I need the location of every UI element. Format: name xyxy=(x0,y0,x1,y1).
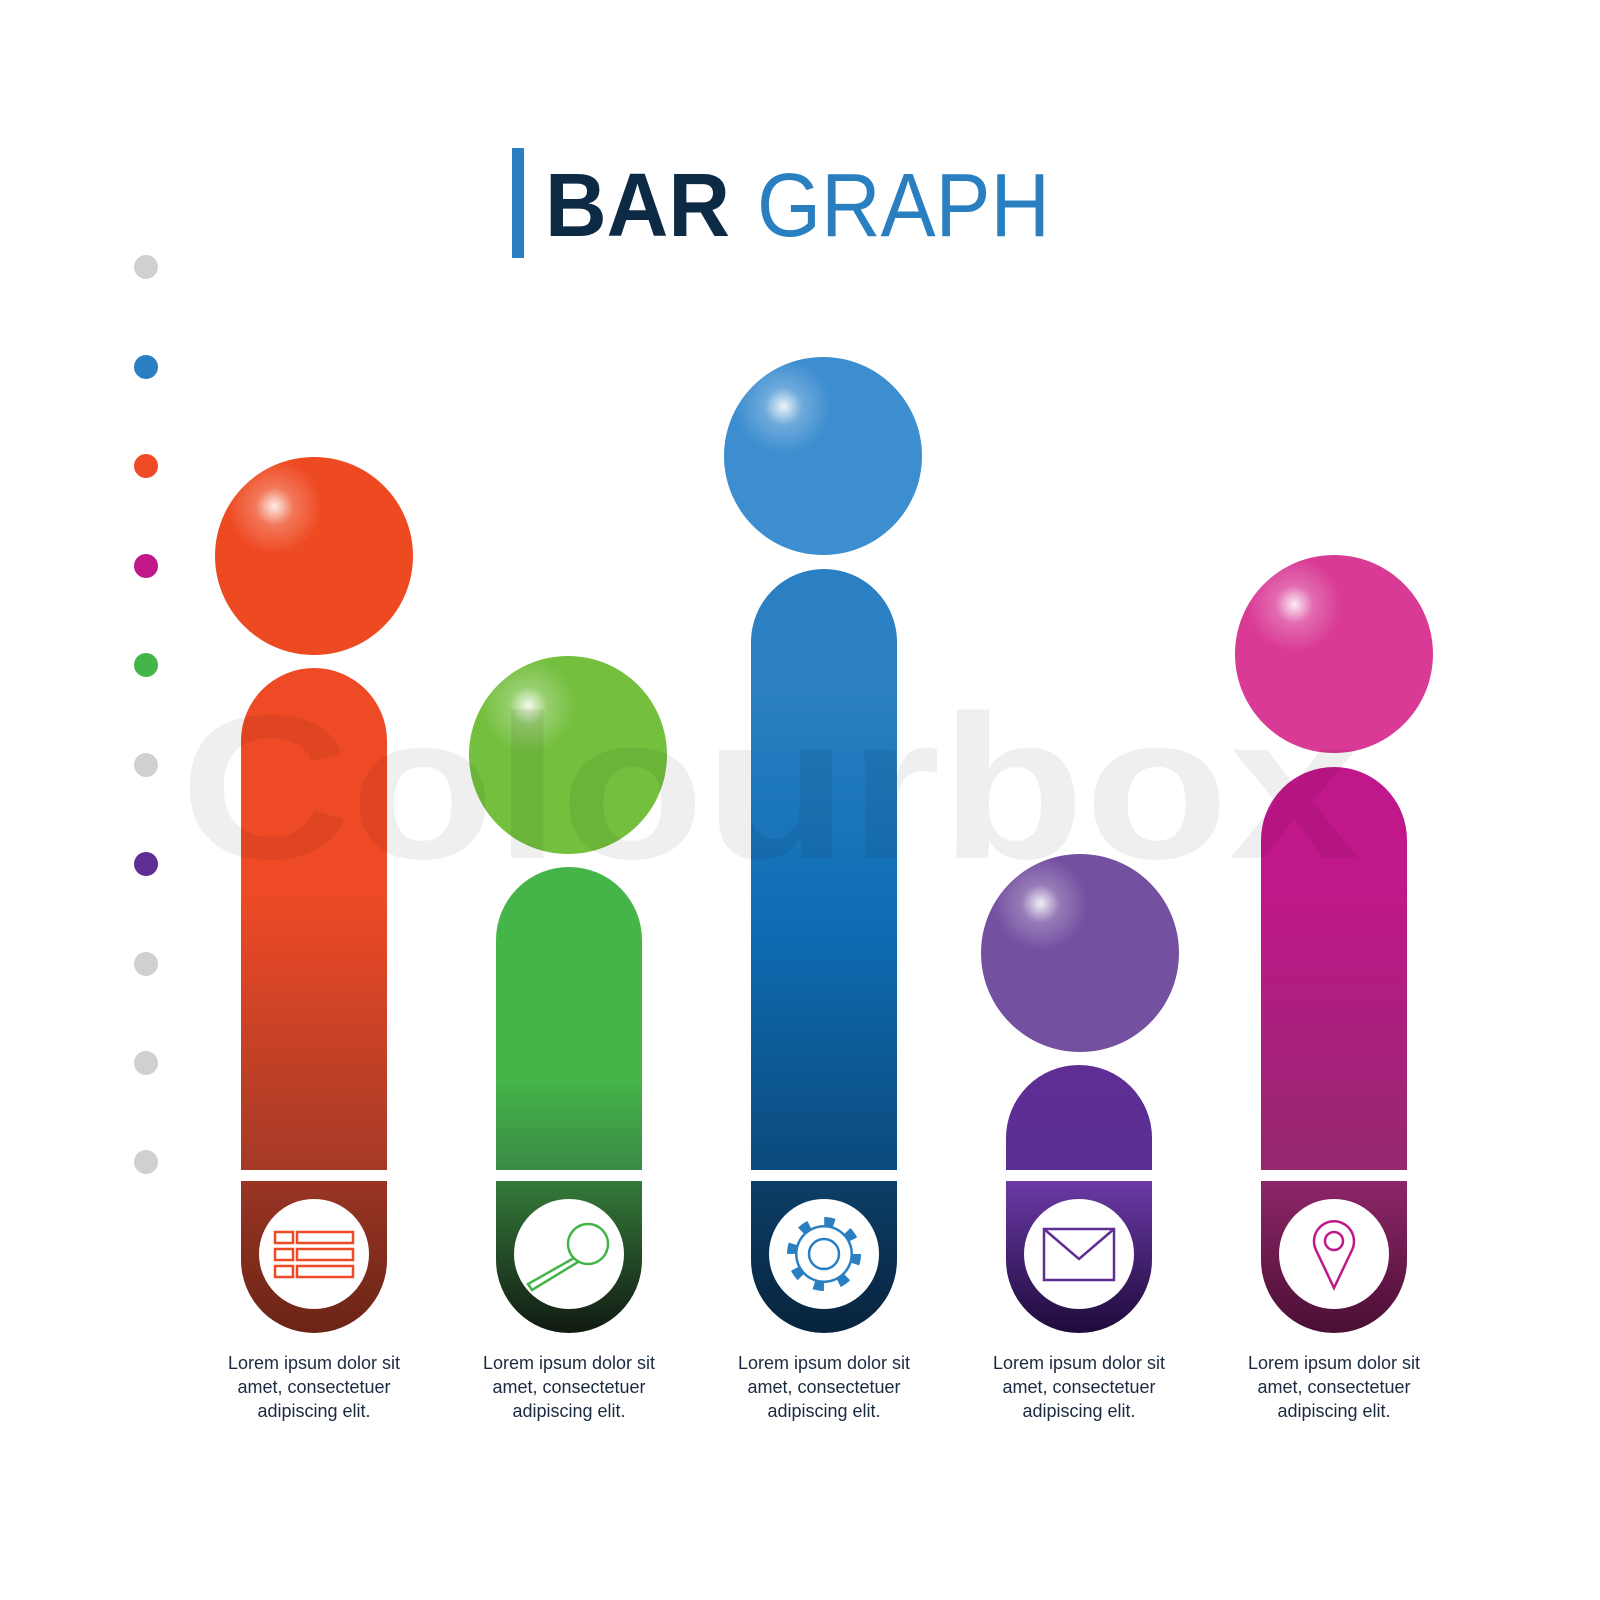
bar: green xyxy=(469,656,667,1333)
captions: adipiscing elit. xyxy=(257,1401,371,1421)
captions: Lorem ipsum dolor sit xyxy=(483,1353,655,1373)
icon: envelope xyxy=(1024,1199,1134,1309)
icon: list xyxy=(259,1199,369,1309)
captions: amet, consectetuer xyxy=(492,1377,646,1397)
axis dots xyxy=(134,255,158,1174)
captions: amet, consectetuer xyxy=(1257,1377,1411,1397)
captions xyxy=(228,1353,1420,1421)
bar: blue xyxy=(724,357,922,1333)
captions: amet, consectetuer xyxy=(747,1377,901,1397)
captions: amet, consectetuer xyxy=(1002,1377,1156,1397)
icon: location pin xyxy=(1279,1199,1389,1309)
captions: adipiscing elit. xyxy=(1022,1401,1136,1421)
captions: amet, consectetuer xyxy=(237,1377,391,1397)
bar: purple xyxy=(981,854,1179,1333)
captions: Lorem ipsum dolor sit xyxy=(738,1353,910,1373)
captions: Lorem ipsum dolor sit xyxy=(228,1353,400,1373)
icon: gear xyxy=(769,1199,879,1309)
captions: Lorem ipsum dolor sit xyxy=(993,1353,1165,1373)
watermark: Colourbox xyxy=(180,673,1360,902)
title: BAR xyxy=(545,156,730,256)
captions: adipiscing elit. xyxy=(512,1401,626,1421)
title xyxy=(512,148,1050,258)
title: GRAPH xyxy=(757,156,1050,256)
captions: adipiscing elit. xyxy=(1277,1401,1391,1421)
icon: magnifier xyxy=(514,1199,624,1309)
bar: red xyxy=(215,457,413,1333)
captions: adipiscing elit. xyxy=(767,1401,881,1421)
captions: Lorem ipsum dolor sit xyxy=(1248,1353,1420,1373)
bar: magenta xyxy=(1235,555,1433,1333)
